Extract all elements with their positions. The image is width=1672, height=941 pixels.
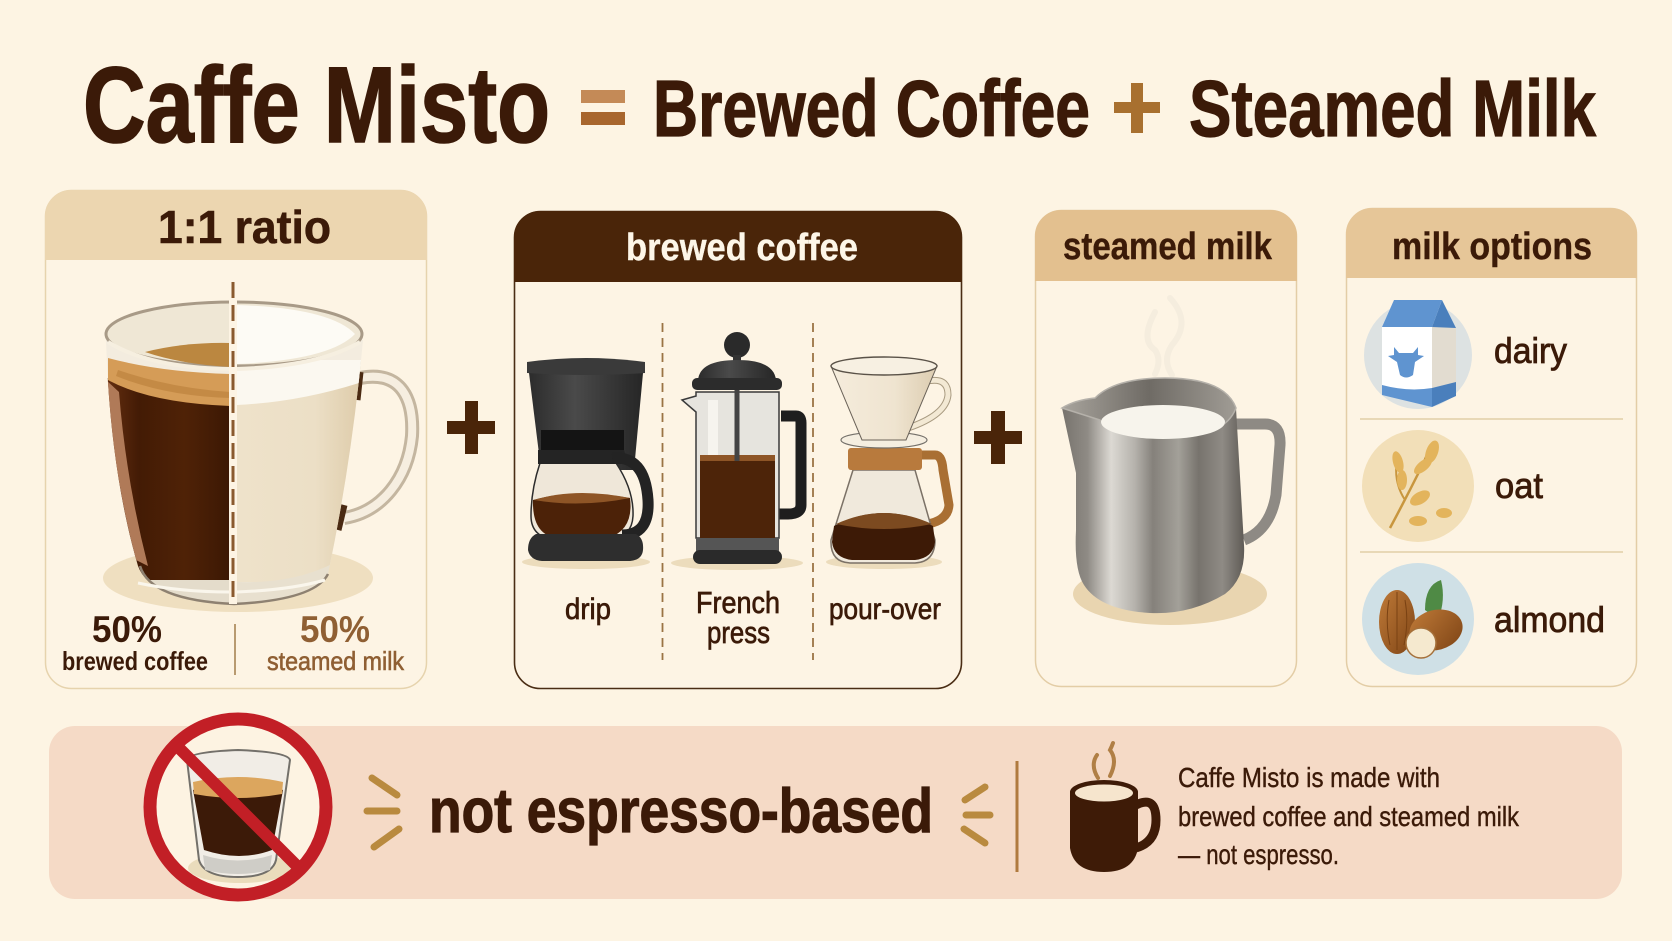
label: oat: oat (1495, 465, 1543, 506)
label: dairy: dairy (1494, 330, 1567, 371)
stat: 50% brewed coffee (62, 609, 208, 676)
stat: 50% brewed coffee: brewed coffee (62, 646, 208, 676)
stat: 50% brewed coffee: 50% (92, 609, 162, 650)
label: French press: press (707, 615, 770, 650)
icon: steaming coffee mug (1070, 743, 1156, 872)
label: pour-over: pour-over (829, 593, 941, 626)
panel: steamed milk (1035, 210, 1297, 686)
text: banner explanation (1178, 762, 1520, 870)
decoration: left burst rays (367, 778, 399, 847)
panel: 1:1 ratio (45, 190, 427, 688)
icon: almonds with leaf (1362, 563, 1474, 675)
panel: milk options (1346, 208, 1637, 686)
title: Caffe Misto: Caffe Misto (83, 44, 550, 165)
handle (1236, 424, 1280, 540)
rim (106, 302, 362, 366)
stat: 50% steamed milk: steamed milk (267, 646, 405, 676)
icon: prohibited espresso shot (150, 719, 326, 895)
text: banner explanation: Caffe Misto is made with (1178, 762, 1440, 793)
label: almond: almond (1494, 599, 1605, 640)
illustration: pour-over dripper and carafe (826, 357, 949, 569)
panel header: 1:1 ratio: 1:1 ratio (158, 201, 331, 253)
panel header: milk options (1346, 208, 1637, 278)
icon: dairy milk carton (1364, 300, 1472, 409)
panel: brewed coffee (514, 211, 962, 688)
stat: 50% steamed milk (267, 609, 405, 676)
icon: plus between brewed coffee and steamed milk (974, 411, 1022, 464)
illustration: steel milk pitcher with steam (1062, 298, 1280, 625)
text: banner explanation: — not espresso. (1178, 839, 1339, 870)
panel header: brewed coffee (514, 211, 962, 282)
label: French press: French (696, 585, 780, 620)
icon: plus between ratio and brewed coffee (447, 401, 495, 454)
dashed centre divider (229, 282, 237, 604)
illustration: half coffee half milk glass mug (100, 282, 412, 612)
heading: not espresso-based: not espresso-based (429, 777, 933, 846)
icon: plus sign (1114, 83, 1160, 133)
illustration: drip coffee maker (522, 358, 650, 569)
label: French press (696, 585, 780, 650)
steam (1148, 298, 1182, 375)
icon: equals sign (581, 90, 625, 125)
icon: oat sprig (1362, 430, 1474, 542)
panel header: 1:1 ratio (45, 190, 427, 260)
text: banner explanation: brewed coffee and steamed milk (1178, 801, 1520, 832)
panel header: brewed coffee: brewed coffee (626, 227, 858, 269)
illustration: French press (671, 332, 803, 570)
heading: Brewed Coffee: Brewed Coffee (653, 64, 1090, 153)
panel header: steamed milk (1035, 210, 1297, 281)
decoration: right burst rays (964, 787, 990, 843)
mug handle (338, 372, 412, 530)
panel header: milk options: milk options (1392, 226, 1592, 268)
label: drip: drip (565, 593, 611, 626)
panel header: steamed milk: steamed milk (1063, 226, 1273, 268)
stat: 50% steamed milk: 50% (300, 609, 370, 650)
title equation (83, 44, 1596, 165)
banner: not espresso-based (49, 719, 1622, 899)
